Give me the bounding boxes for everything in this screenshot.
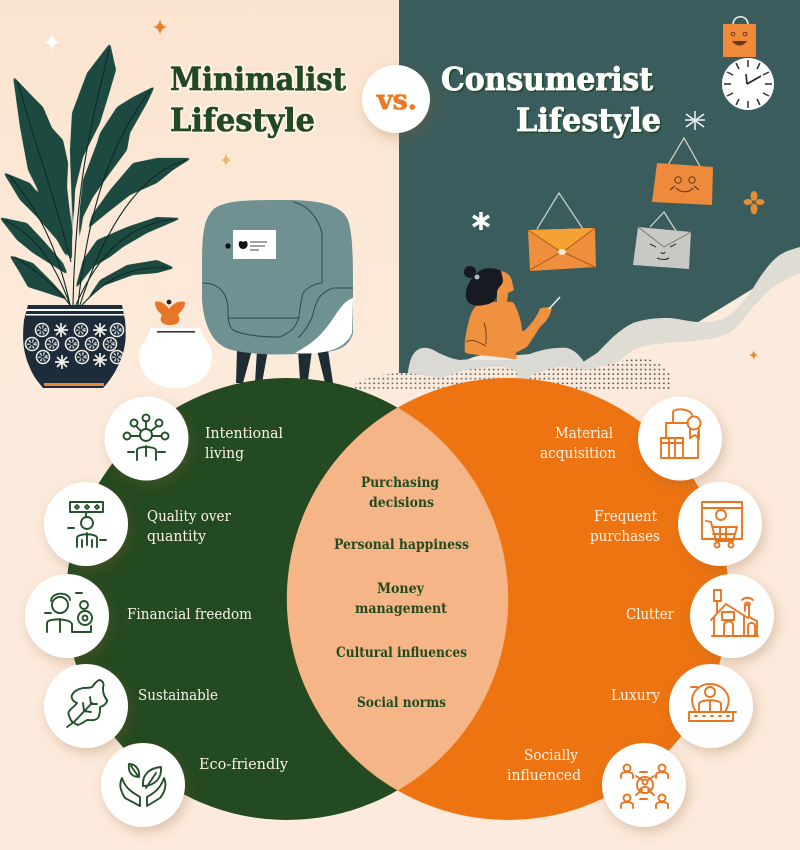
right list labels: Material xyxy=(555,426,613,442)
left circle: minimalist xyxy=(66,378,508,820)
right list labels xyxy=(507,426,674,784)
armchair xyxy=(202,200,353,383)
right list labels: purchases xyxy=(590,529,660,545)
shared centre labels: decisions xyxy=(369,495,434,511)
shared centre labels xyxy=(334,475,469,711)
decorative dotted ground xyxy=(350,358,672,390)
vs badge: vs. xyxy=(376,85,417,116)
orange flower xyxy=(744,191,764,214)
left list labels xyxy=(127,426,289,773)
envelope: orange large xyxy=(528,193,596,271)
shared centre labels: Social norms xyxy=(357,695,446,711)
right list labels: influenced xyxy=(507,768,581,784)
title: minimalist xyxy=(170,60,346,139)
left list labels: living xyxy=(205,446,244,462)
envelope: orange with smile xyxy=(652,138,713,205)
title: consumerist: Lifestyle xyxy=(516,101,661,139)
icon: luxury person xyxy=(669,664,753,748)
left list labels: Sustainable xyxy=(138,688,218,704)
left list labels: quantity xyxy=(147,529,207,545)
overlap lens xyxy=(287,408,508,790)
icon: social influence xyxy=(602,743,686,827)
pot xyxy=(23,305,126,388)
sparkle: pale gold xyxy=(221,154,231,166)
icon: eco hands xyxy=(101,743,185,827)
woman with phone xyxy=(464,266,560,360)
envelope: grey with face xyxy=(633,212,691,269)
small orange sparkle xyxy=(749,350,758,360)
right list labels: acquisition xyxy=(540,446,616,462)
title: minimalist: Lifestyle xyxy=(170,101,315,139)
right list labels: Luxury xyxy=(611,688,661,704)
shopping bag with face xyxy=(723,17,756,57)
right list labels: Socially xyxy=(524,748,579,764)
title: consumerist xyxy=(441,60,661,139)
icon: leaf xyxy=(44,664,128,748)
icon: frequent purchases xyxy=(678,482,762,566)
shared centre labels: Cultural influences xyxy=(336,645,467,661)
title: consumerist: Consumerist xyxy=(441,60,653,98)
white star asterisk xyxy=(473,212,489,230)
icon: material acquisition xyxy=(638,396,722,480)
icon: financial freedom xyxy=(25,574,109,658)
icon: clutter house xyxy=(690,574,774,658)
white sparkle asterisk xyxy=(685,111,705,130)
shared centre labels: Money xyxy=(377,581,425,597)
sparkle: white xyxy=(44,33,60,51)
right list labels: Frequent xyxy=(594,509,657,525)
left list labels: Intentional xyxy=(205,426,283,442)
side table with orange bunny xyxy=(139,300,212,388)
left list labels: Quality over xyxy=(147,509,231,525)
sparkle: orange xyxy=(153,19,167,35)
vs badge xyxy=(362,65,430,133)
shared centre labels: Purchasing xyxy=(361,475,439,491)
left list labels: Eco-friendly xyxy=(199,757,289,773)
right list labels: Clutter xyxy=(626,607,674,623)
left list labels: Financial freedom xyxy=(127,607,252,623)
title: minimalist: Minimalist xyxy=(170,60,346,98)
shared centre labels: management xyxy=(355,601,447,617)
icon: quality over quantity xyxy=(44,482,128,566)
panel: dark consumerist background xyxy=(399,0,800,400)
plant xyxy=(0,43,192,388)
shared centre labels: Personal happiness xyxy=(334,537,469,553)
clock xyxy=(722,58,774,110)
right circle: consumerist xyxy=(287,378,729,820)
icon: intentional living xyxy=(104,396,188,480)
